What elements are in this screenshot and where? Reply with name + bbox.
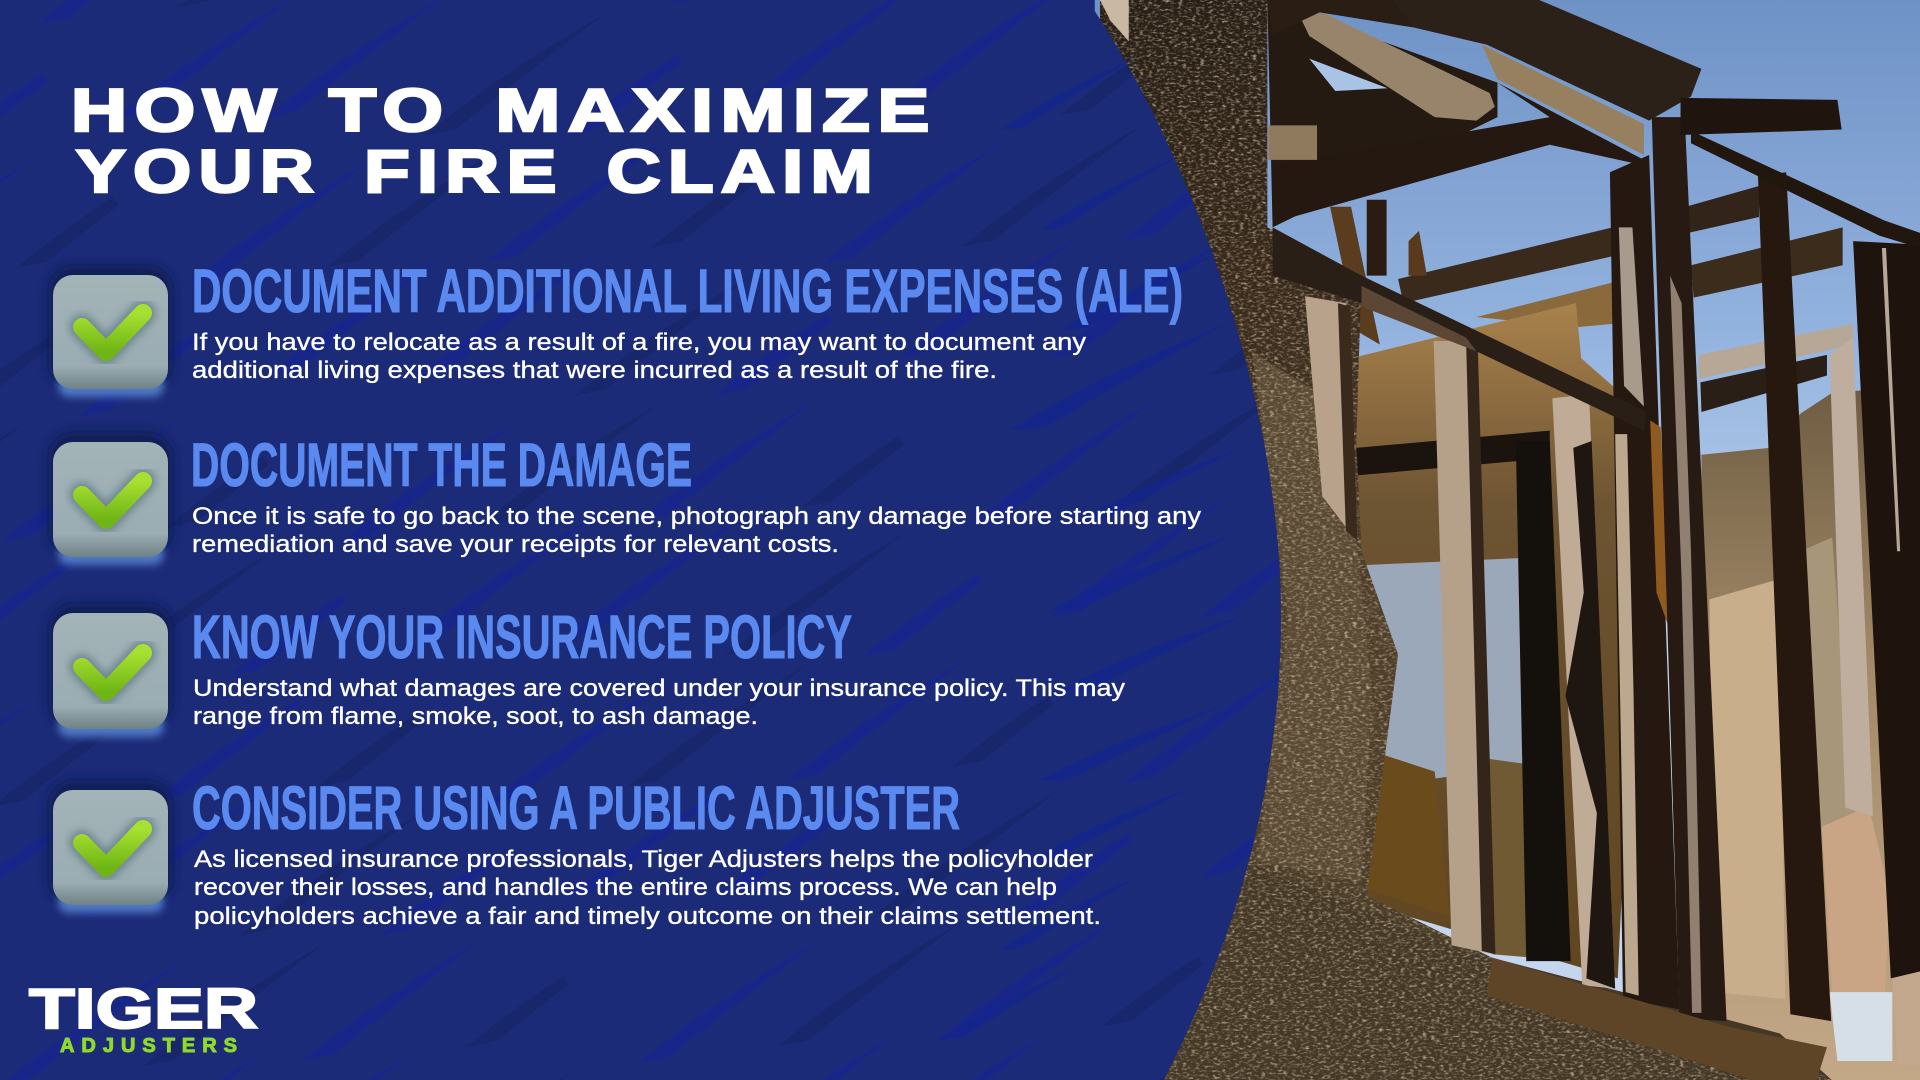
- icon: checkbox: [49, 433, 172, 565]
- item: document ALE: [49, 257, 1183, 397]
- body text: recover their losses, and handles the entire claims process. We can help: [194, 874, 1057, 901]
- logo: Tiger Adjusters: TIGER: [29, 977, 258, 1041]
- body text: If you have to relocate as a result of a fire, you may want to document any: [192, 329, 1086, 356]
- body text: policyholders achieve a fair and timely outcome on their claims settlement.: [194, 903, 1101, 930]
- charred roof beams: [1267, 0, 1920, 1080]
- body text: range from flame, smoke, soot, to ash damage.: [193, 703, 758, 730]
- charred wall: [1100, 0, 1843, 1080]
- title: YOUR FIRE CLAIM: [76, 138, 880, 205]
- background streak pattern: [935, 57, 1251, 1046]
- heading: DOCUMENT ADDITIONAL LIVING EXPENSES (ALE): [192, 257, 1183, 325]
- logo: Tiger Adjusters: ADJUSTERS: [60, 1035, 237, 1057]
- icon: checkbox: [49, 266, 172, 397]
- charred columns: [1610, 117, 1920, 1065]
- heading: CONSIDER USING A PUBLIC ADJUSTER: [192, 774, 960, 842]
- heading: KNOW YOUR INSURANCE POLICY: [192, 603, 852, 671]
- body text: [192, 503, 1201, 558]
- icon: checkbox: [49, 781, 172, 913]
- body text: additional living expenses that were incurred as a result of the fire.: [192, 357, 997, 384]
- body text: Understand what damages are covered under your insurance policy. This may: [193, 675, 1125, 702]
- item: document damage: [49, 431, 1201, 565]
- title: HOW TO MAXIMIZE: [71, 77, 937, 144]
- logo: Tiger Adjusters: [29, 977, 258, 1057]
- photo: burned house frame: [1095, 0, 1920, 1080]
- body text: remediation and save your receipts for relevant costs.: [192, 531, 839, 558]
- body text: [192, 329, 1086, 384]
- item: know policy: [49, 603, 1125, 737]
- heading: DOCUMENT THE DAMAGE: [191, 431, 692, 499]
- icon: checkbox: [49, 604, 172, 737]
- wood studs: [1305, 296, 1873, 989]
- item: public adjuster: [49, 774, 1101, 930]
- body text: Once it is safe to go back to the scene, photograph any damage before starting any: [192, 503, 1201, 530]
- body text: [194, 846, 1101, 930]
- title: [71, 77, 937, 205]
- body text: As licensed insurance professionals, Tiger Adjusters helps the policyholder: [194, 846, 1093, 873]
- room interior: [1351, 303, 1644, 978]
- panel: blue curved background: [0, 0, 1281, 1080]
- body text: [193, 675, 1125, 730]
